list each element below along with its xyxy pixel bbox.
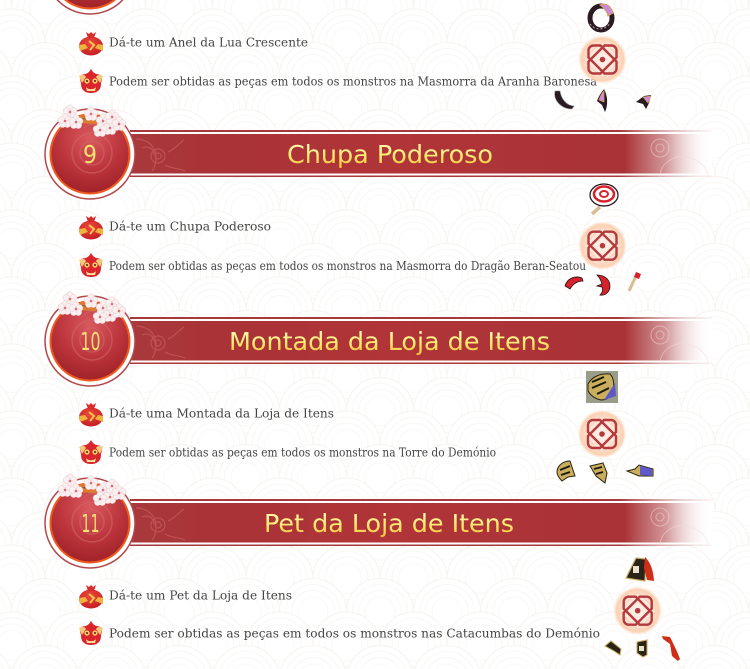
number: 11 — [82, 509, 100, 538]
icon: lion — [79, 440, 103, 464]
icon: pet tag pieces — [605, 636, 680, 661]
number badge: section 8 (cropped) — [45, 0, 135, 14]
source text: Podem ser obtidas as peças em todos os monstros na Torre do Demónio — [109, 444, 496, 460]
number: 10 — [80, 327, 100, 356]
source text: Podem ser obtidas as peças em todos os monstros nas Catacumbas do Demónio — [109, 626, 600, 640]
reward text: Dá-te um Pet da Loja de Itens — [109, 588, 292, 602]
icon: ring — [590, 4, 613, 30]
icon: bag — [79, 585, 103, 608]
icon: lollipop — [590, 184, 618, 214]
source text: Podem ser obtidas as peças em todos os monstros na Masmorra do Dragão Beran-Seatou — [109, 259, 586, 273]
icon: pet tag — [626, 557, 654, 581]
icon: bag — [79, 216, 103, 240]
icon: ring pieces — [555, 89, 651, 112]
icon: emblem — [614, 587, 662, 635]
icon: mount scroll — [586, 371, 618, 403]
icon: bag — [79, 32, 103, 56]
section 11 header banner — [45, 474, 712, 568]
reward text: Dá-te um Anel da Lua Crescente — [109, 34, 308, 50]
icon: lion — [79, 253, 103, 277]
section 8 partial — [45, 0, 651, 112]
section 11 content — [79, 557, 680, 661]
icon: lion — [79, 69, 103, 93]
source text: Podem ser obtidas as peças em todos os monstros na Masmorra da Aranha Baronesa — [109, 74, 597, 88]
icon: emblem — [578, 36, 626, 84]
heading: Pet da Loja de Itens — [264, 509, 514, 538]
reward text: Dá-te um Chupa Poderoso — [109, 218, 271, 234]
icon: lollipop pieces — [565, 272, 641, 295]
section 10 header banner — [45, 292, 712, 386]
reward text: Dá-te uma Montada da Loja de Itens — [109, 406, 334, 420]
section 9 content — [79, 184, 641, 295]
heading: Chupa Poderoso — [287, 140, 493, 169]
section 9 header banner — [45, 105, 712, 199]
icon: emblem — [578, 222, 626, 270]
heading: Montada da Loja de Itens — [229, 327, 550, 356]
icon: lion — [79, 621, 103, 645]
icon: mount pieces — [557, 461, 653, 483]
icon: bag — [79, 403, 103, 426]
section 10 content — [79, 371, 653, 483]
number: 9 — [83, 140, 97, 169]
icon: emblem — [578, 410, 626, 458]
